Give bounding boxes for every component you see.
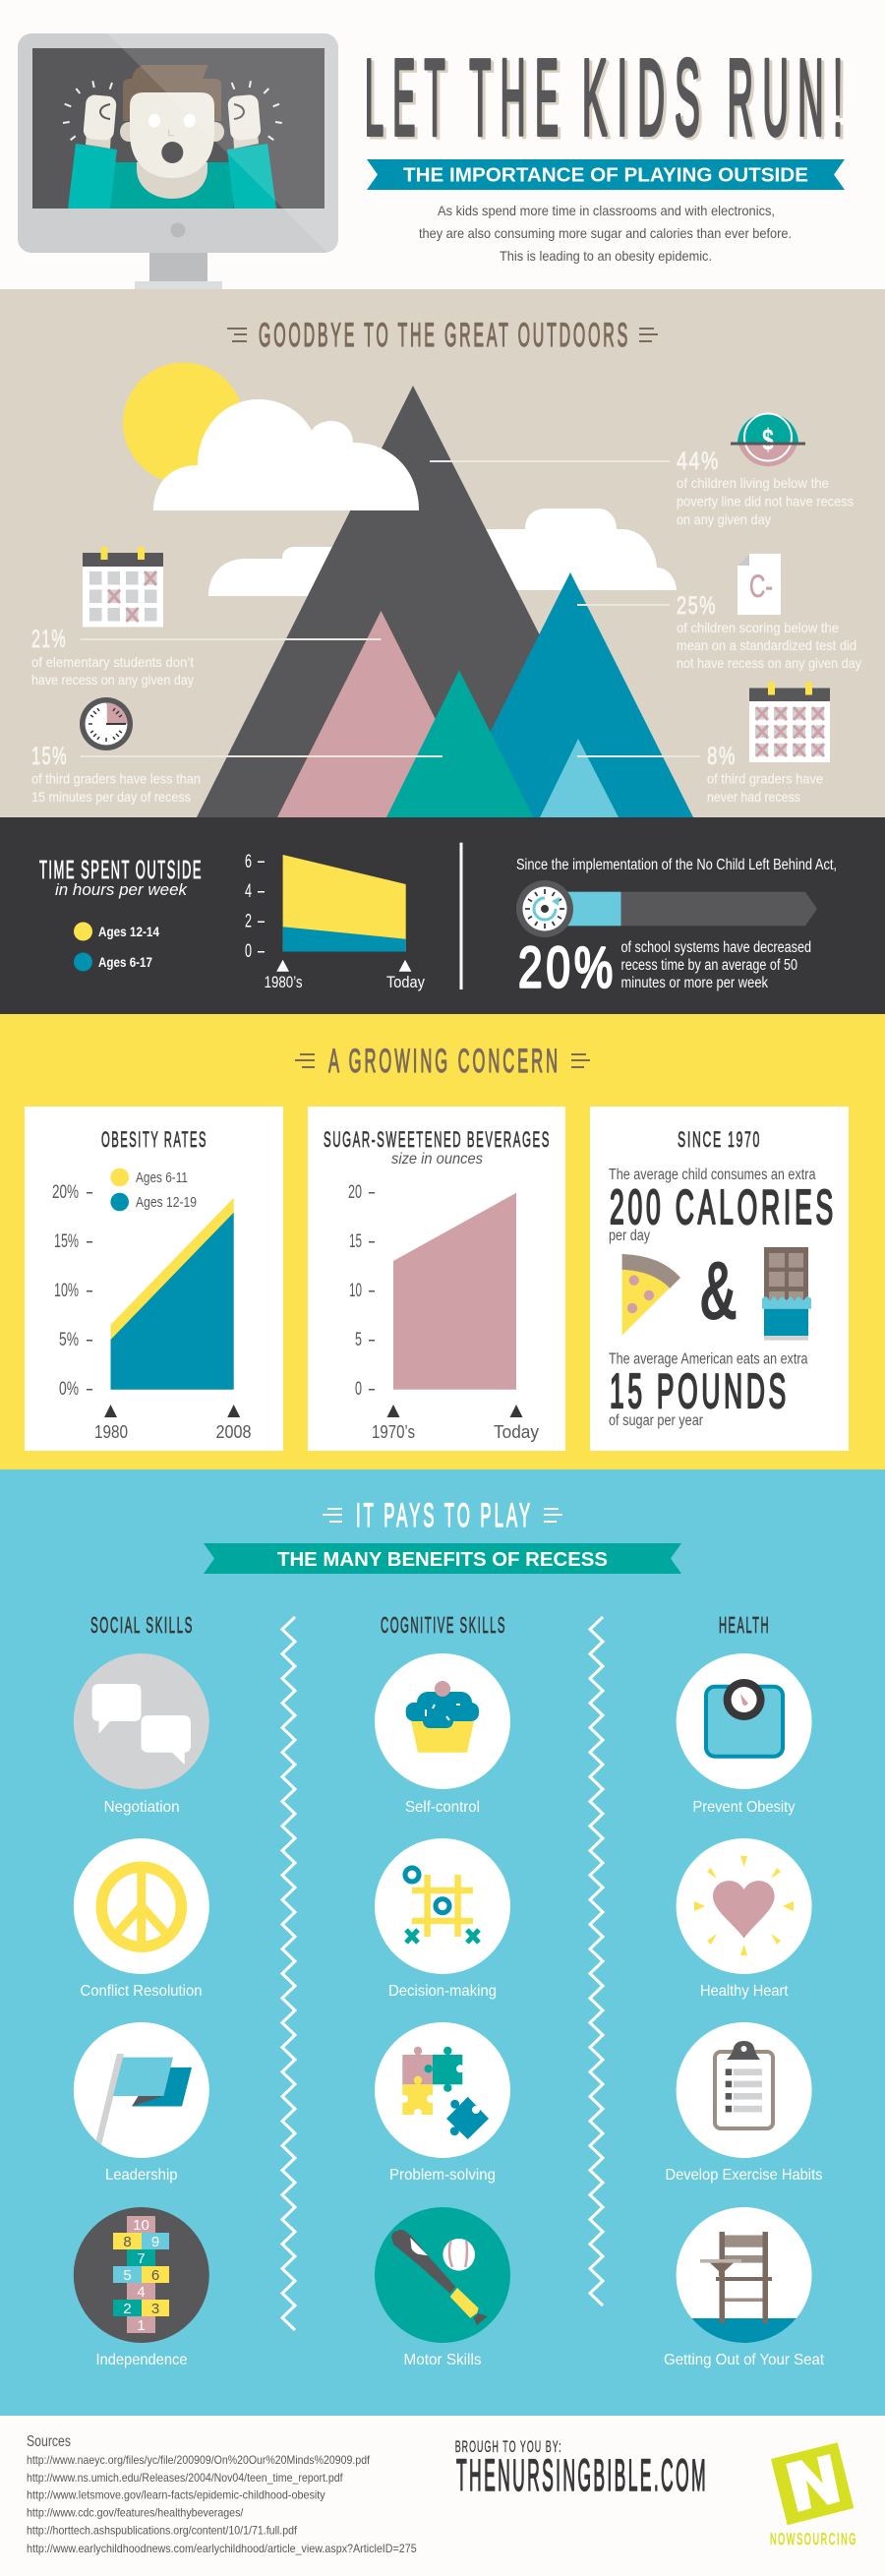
area chart: beverage size: Today — [494, 1422, 539, 1442]
area chart: obesity: 10% — [54, 1281, 79, 1301]
heading: A GROWING CONCERN — [328, 1043, 560, 1080]
icon: negotiation speech bubbles — [74, 1653, 209, 1789]
area chart: obesity: 0% — [59, 1379, 79, 1400]
stat: 44%: on any given day — [677, 511, 771, 527]
ribbon: many benefits — [204, 1543, 681, 1574]
card: since 1970 — [590, 1107, 849, 1451]
label: Independence — [96, 2352, 188, 2368]
area chart: hours per week: 2 — [245, 911, 252, 932]
stat: 15 pounds: The average American eats an extra — [609, 1351, 808, 1368]
legend: Ages 6-11 — [136, 1170, 188, 1186]
label: Develop Exercise Habits — [665, 2167, 822, 2184]
area chart: beverage size: 20 — [348, 1182, 362, 1203]
stat: 15%: 15 minutes per day of recess — [31, 789, 191, 805]
label: Problem-solving — [389, 2167, 496, 2184]
icon: flag — [74, 2022, 209, 2158]
card: obesity rates: OBESITY RATES — [101, 1127, 207, 1152]
icon: calendar all crossed — [749, 683, 830, 762]
stat: 20%: minutes or more per week — [621, 975, 768, 991]
icon: graded test: C- — [749, 569, 773, 604]
sources: http://www.letsmove.gov/learn-facts/epidemic-childhood-obesity — [27, 2488, 325, 2502]
label: Getting Out of Your Seat — [664, 2352, 825, 2368]
panel: a growing concern — [0, 1014, 885, 1469]
icon: bathroom scale — [677, 1653, 812, 1789]
title — [365, 37, 856, 161]
stat: 15%: 15% — [31, 743, 68, 770]
stat: 8% — [707, 743, 823, 805]
icon: hopscotch: 7 — [137, 2250, 146, 2267]
heading — [39, 857, 203, 899]
stat: 200 calories: per day — [609, 1228, 650, 1244]
stat: 20%: recess time by an average of 50 — [621, 957, 797, 974]
illustration: sun — [123, 362, 244, 484]
label: Leadership — [105, 2167, 178, 2184]
label: Prevent Obesity — [692, 1799, 795, 1816]
card: sugar-sweetened beverages: SUGAR-SWEETENED BEVERAGES — [324, 1127, 551, 1152]
icon: hopscotch: 8 — [123, 2234, 132, 2250]
column headings: COGNITIVE SKILLS — [381, 1612, 506, 1638]
intro text — [419, 203, 792, 264]
heading: TIME SPENT OUTSIDE — [39, 857, 203, 884]
sources: http://www.cdc.gov/features/healthybeverages/ — [27, 2506, 244, 2520]
leader lines — [81, 461, 700, 756]
subtitle ribbon: THE IMPORTANCE OF PLAYING OUTSIDE — [403, 165, 808, 187]
stat: 20% — [518, 936, 811, 999]
icon: cupcake — [375, 1653, 510, 1789]
logo: nowsourcing — [770, 2442, 857, 2548]
ampersand: & — [699, 1244, 738, 1337]
footer — [27, 2433, 857, 2555]
title: THE — [472, 39, 570, 161]
stat: 20%: 20% — [518, 936, 617, 999]
heading: IT PAYS TO PLAY — [356, 1497, 533, 1534]
sources — [27, 2433, 417, 2555]
icon: coin: $ — [762, 422, 774, 456]
icon: hopscotch: 3 — [151, 2301, 159, 2317]
stat: 15 pounds: of sugar per year — [609, 1412, 703, 1429]
stat: 21%: 21% — [31, 626, 67, 653]
area chart: beverage size: 10 — [349, 1281, 362, 1301]
column headings: SOCIAL SKILLS — [90, 1612, 194, 1638]
area chart: obesity: 15% — [54, 1231, 79, 1252]
area chart: beverage size: 1970’s — [372, 1422, 415, 1442]
icon: calendar with some crossed days — [83, 547, 163, 628]
area chart: hours per week: 1980’s — [265, 973, 303, 991]
area chart: beverage size — [348, 1182, 539, 1442]
label: Conflict Resolution — [81, 1983, 203, 2000]
legend — [74, 923, 159, 972]
sources: http://horttech.ashspublications.org/content/10/1/71.full.pdf — [27, 2524, 298, 2538]
title: LET — [368, 39, 457, 161]
area chart: beverage size: 15 — [349, 1231, 362, 1252]
stat: 15% — [31, 743, 201, 805]
icon: coin — [731, 413, 805, 466]
illustration: mountains — [197, 386, 693, 817]
intro text: they are also consuming more sugar and calories than ever before. — [419, 225, 792, 241]
area chart: hours per week: 0 — [245, 941, 252, 962]
illustration: back clouds — [208, 509, 677, 596]
icon: heart with rays — [677, 1838, 812, 1974]
legend — [110, 1168, 197, 1211]
icon: hopscotch: 10 — [133, 2217, 149, 2234]
icon: hopscotch: 9 — [151, 2234, 159, 2250]
label: Self-control — [405, 1799, 480, 1816]
label: Motor Skills — [403, 2352, 482, 2368]
stat: 25%: not have recess on any given day — [677, 655, 861, 671]
area chart: hours per week — [245, 852, 425, 991]
stat: 21%: have recess on any given day — [31, 672, 194, 688]
sponsor: BROUGH TO YOU BY: — [455, 2437, 562, 2456]
stat: 25% — [677, 592, 861, 671]
area chart: obesity: 1980 — [94, 1422, 128, 1442]
area chart: obesity — [52, 1182, 252, 1442]
stat: 44% — [677, 448, 854, 527]
icon: hopscotch: 2 — [123, 2301, 132, 2317]
intro text: This is leading to an obesity epidemic. — [500, 248, 712, 264]
stat: 200 calories — [609, 1167, 837, 1244]
panel: goodbye to the great outdoors — [0, 289, 885, 817]
stat: 25%: of children scoring below the — [677, 620, 839, 635]
stat: 8%: of third graders have — [707, 771, 823, 787]
stat: 21% — [31, 626, 194, 688]
area chart: obesity: 2008 — [216, 1422, 252, 1442]
card: since 1970: SINCE 1970 — [678, 1127, 761, 1152]
icon: chocolate bar — [762, 1247, 811, 1341]
icon: puzzle pieces — [375, 2022, 510, 2158]
icon: peace sign — [74, 1838, 209, 1974]
label: Decision-making — [388, 1983, 497, 2000]
icon: bat and ball — [375, 2207, 510, 2343]
area chart: hours per week: Today — [386, 973, 425, 991]
icon: hopscotch: 6 — [151, 2267, 159, 2284]
title: LET — [365, 37, 454, 158]
area chart: hours per week: 4 — [245, 881, 252, 902]
icon: hopscotch: 5 — [123, 2267, 132, 2284]
stat: 15 pounds — [609, 1351, 808, 1429]
stat: 15%: of third graders have less than — [31, 771, 201, 787]
sponsor — [455, 2437, 708, 2500]
icon: hopscotch: 1 — [137, 2317, 146, 2334]
stat: 8%: never had recess — [707, 789, 800, 805]
icon: clock and progress arrow — [516, 880, 817, 937]
ribbon: many benefits: THE MANY BENEFITS OF RECESS — [277, 1549, 608, 1571]
stat: 25%: 25% — [677, 592, 717, 620]
label: Healthy Heart — [700, 1983, 789, 2000]
card: sugar-sweetened beverages — [308, 1107, 565, 1451]
stat: 44%: 44% — [677, 448, 720, 475]
icon: clock with quarter highlighted — [80, 697, 133, 750]
icon: graded test — [738, 554, 781, 615]
card: obesity rates — [25, 1107, 283, 1451]
icon: pizza slice — [622, 1254, 680, 1336]
label: Negotiation — [104, 1799, 180, 1816]
stat: 25%: mean on a standardized test did — [677, 637, 856, 653]
card: sugar-sweetened beverages: size in ounces — [391, 1151, 483, 1168]
header section — [18, 33, 856, 289]
icon: clipboard — [677, 2022, 812, 2158]
icon: computer monitor with screaming kid — [18, 33, 338, 289]
sources: Sources — [27, 2433, 71, 2450]
subtitle ribbon — [367, 159, 845, 190]
icon: tic-tac-toe — [375, 1838, 510, 1974]
stat: 8%: 8% — [707, 743, 737, 770]
legend: Ages 12-19 — [136, 1195, 197, 1211]
icon: high chair — [677, 2207, 812, 2343]
area chart: obesity: 20% — [52, 1182, 79, 1203]
stat: 21%: of elementary students don’t — [31, 654, 194, 670]
stat: 20%: of school systems have decreased — [621, 939, 811, 956]
sources: http://www.earlychildhoodnews.com/earlychildhood/article_view.aspx?ArticleID=275 — [27, 2542, 417, 2555]
column headings — [90, 1612, 770, 1638]
area chart: beverage size: 5 — [355, 1330, 362, 1350]
panel: time spent outside — [0, 817, 885, 1014]
stat: 44%: of children living below the — [677, 475, 829, 491]
heading: in hours per week — [55, 880, 188, 899]
legend: Ages 12-14 — [98, 925, 159, 939]
area chart: obesity: 5% — [59, 1330, 79, 1350]
icon: hopscotch: 4 — [137, 2284, 146, 2301]
intro text: As kids spend more time in classrooms and with electronics, — [438, 203, 775, 218]
area chart: hours per week: 6 — [245, 852, 252, 872]
illustration: front cloud — [153, 399, 419, 510]
stat: 44%: poverty line did not have recess — [677, 494, 854, 509]
area chart: beverage size: 0 — [355, 1379, 362, 1400]
sources: http://www.ns.umich.edu/Releases/2004/Nov04/teen_time_report.pdf — [27, 2471, 343, 2485]
legend: Ages 6-17 — [98, 955, 152, 970]
title: THE — [469, 37, 567, 158]
panel: it pays to play — [0, 1469, 885, 2416]
sources: http://www.naeyc.org/files/yc/file/200909/On%20Our%20Minds%20909.pdf — [27, 2453, 371, 2467]
panel: it pays to play: HEALTH — [719, 1612, 770, 1638]
stat: 200 calories: The average child consumes an extra — [609, 1167, 816, 1183]
icon: hopscotch — [74, 2207, 209, 2343]
